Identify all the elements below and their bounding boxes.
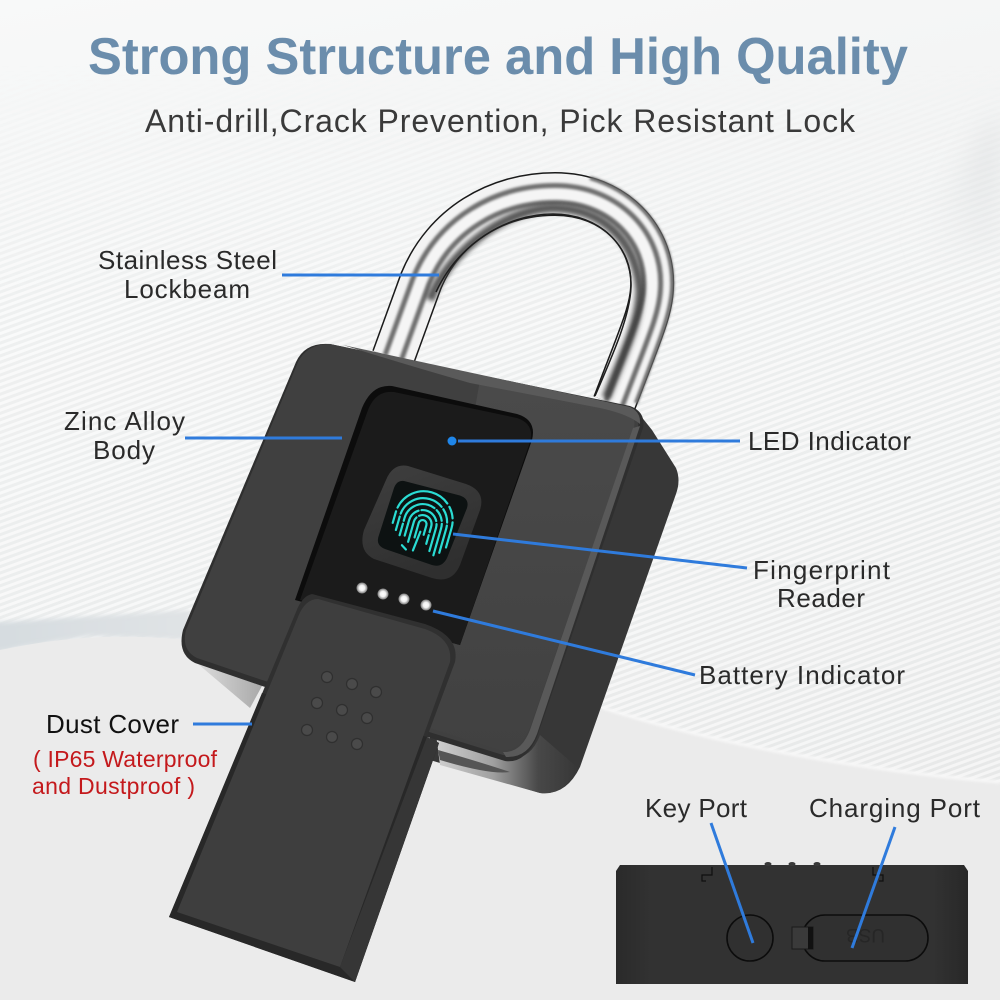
- label: LED indicator: LED Indicator: [748, 426, 911, 456]
- label: battery indicator: Battery Indicator: [699, 660, 905, 690]
- right plate face: [420, 380, 634, 750]
- cover lower edge: [169, 693, 439, 982]
- front plate rim: [182, 344, 643, 761]
- shackle: [393, 178, 672, 404]
- callout lines: [185, 275, 895, 948]
- label: zinc alloy body: Body: [93, 435, 155, 465]
- label: key port: Key Port: [645, 793, 748, 823]
- flap tab: [792, 927, 813, 949]
- port end body: [616, 865, 968, 984]
- cover face: [177, 599, 450, 967]
- key port circle: [727, 915, 773, 961]
- cover outer edge: [169, 594, 456, 982]
- label: zinc alloy body: [64, 406, 185, 465]
- fingerprint bezel: [362, 466, 481, 579]
- battery indicator dots: [356, 582, 432, 610]
- notches: [702, 867, 883, 881]
- dust cover: [169, 594, 456, 982]
- charging port cover: [802, 915, 928, 961]
- fingerprint panel: [295, 386, 533, 645]
- title: Strong Structure and High Quality: [88, 28, 908, 86]
- label: stainless steel lockbeam: Stainless Steel: [98, 245, 277, 275]
- note: waterproof: [32, 746, 218, 799]
- cover side strip: [340, 737, 439, 982]
- icon: fingerprint: [387, 484, 460, 560]
- shackle outer grey edge: [590, 178, 672, 403]
- padlock illustration: [169, 178, 678, 982]
- lock body side: [430, 410, 678, 793]
- cover dimples: [302, 672, 382, 750]
- background: [0, 0, 1000, 782]
- fingerprint sensor: [378, 481, 468, 566]
- note: waterproof: ( IP65 Waterproof: [33, 746, 218, 772]
- front plate face: [185, 344, 638, 755]
- subtitle: Anti-drill,Crack Prevention, Pick Resistant Lock: [145, 103, 856, 139]
- top bumps: [764, 862, 820, 866]
- key port view: [616, 862, 968, 984]
- charging slot on underside: [438, 750, 510, 772]
- left underside: [198, 664, 262, 708]
- label: fingerprint reader: Reader: [777, 583, 865, 613]
- body underside: [436, 734, 578, 793]
- right rim highlight: [503, 426, 640, 757]
- label: fingerprint reader: Fingerprint: [753, 555, 891, 585]
- label: stainless steel lockbeam: Lockbeam: [124, 274, 250, 304]
- label: dust cover: Dust Cover: [46, 709, 179, 739]
- LED indicator dot: [448, 436, 456, 446]
- shackle inner dark shading: [430, 208, 640, 398]
- label: stainless steel lockbeam: [98, 245, 277, 304]
- note: waterproof: and Dustproof ): [32, 773, 195, 799]
- USB embossed text: USB: [846, 924, 885, 945]
- label: fingerprint reader: [753, 555, 891, 613]
- top highlight rim: [343, 345, 640, 424]
- label: zinc alloy body: Zinc Alloy: [64, 406, 185, 436]
- label: charging port: Charging Port: [809, 793, 981, 823]
